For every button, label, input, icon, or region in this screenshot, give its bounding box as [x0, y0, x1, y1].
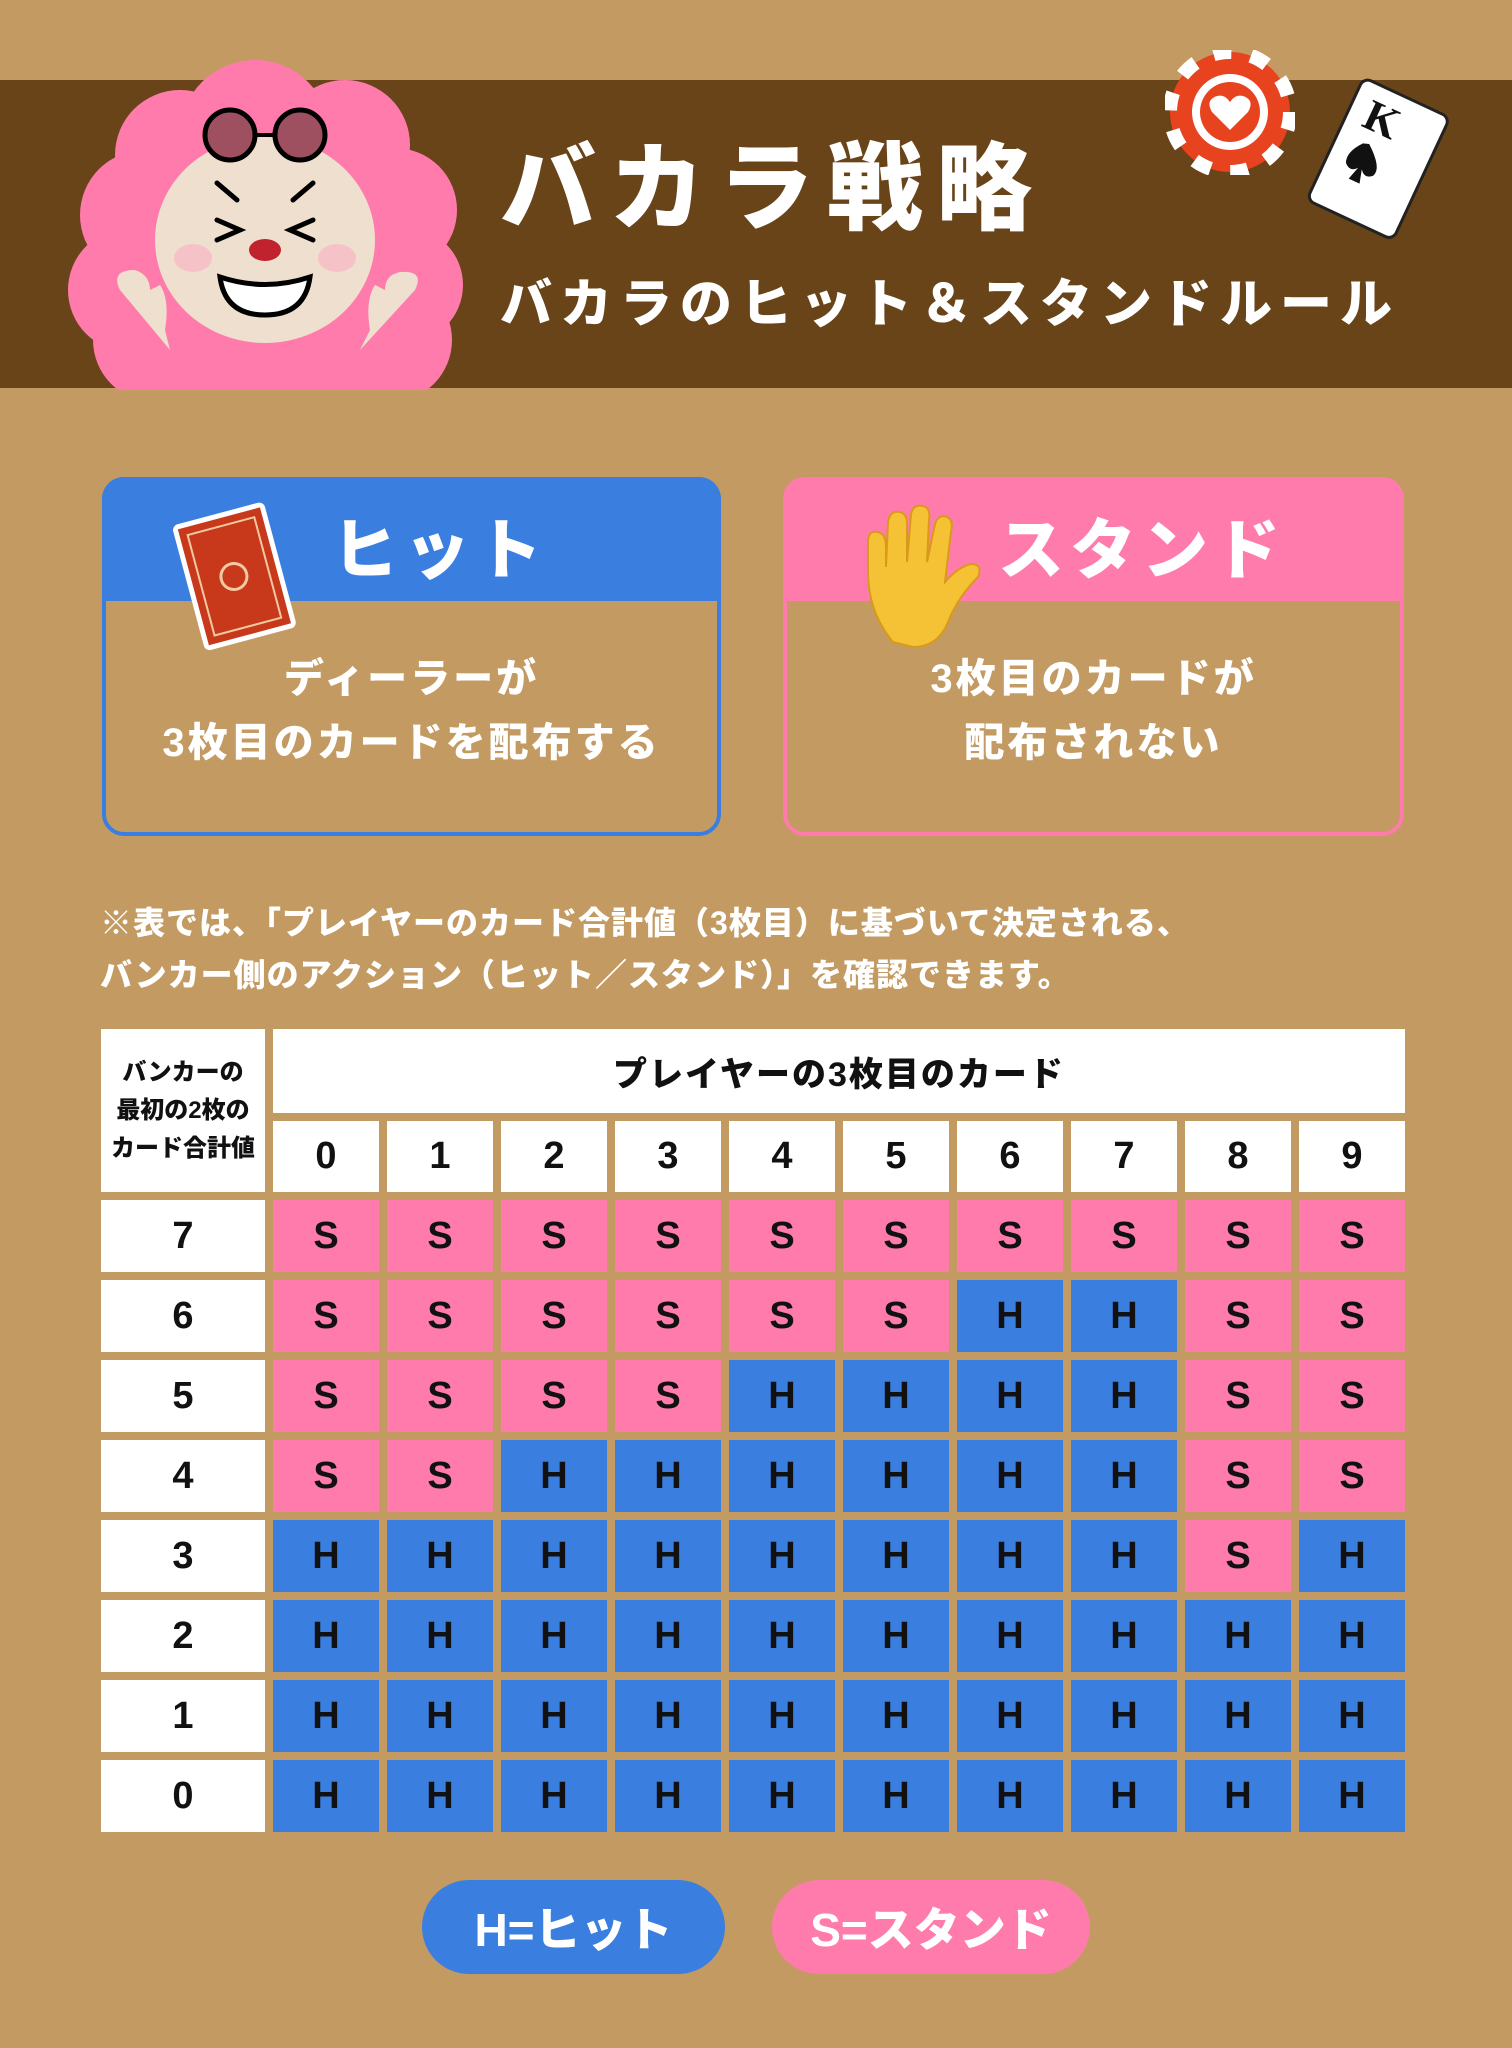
table: banker action: H — [882, 1774, 910, 1816]
table: banker action: S — [655, 1374, 681, 1416]
legend: stand — [772, 1880, 1090, 1974]
table: banker action: H — [768, 1614, 796, 1656]
corner header: 最初の2枚の — [116, 1096, 250, 1124]
table: banker action: S — [427, 1294, 453, 1336]
mascot character — [68, 60, 463, 390]
icon: raised hand — [867, 504, 980, 648]
note text: ※表では、「プレイヤーのカード合計値（3枚目）に基づいて決定される、 — [100, 905, 1190, 941]
table: banker action: H — [312, 1774, 340, 1816]
icon: card back — [173, 502, 296, 650]
table: banker action: H — [654, 1534, 682, 1576]
corner header — [101, 1029, 265, 1192]
table: banker action: H — [1224, 1774, 1252, 1816]
table: banker action: H — [654, 1454, 682, 1496]
table: banker action: H — [1110, 1374, 1138, 1416]
table: banker action: H — [882, 1374, 910, 1416]
table: banker action: S — [1339, 1454, 1365, 1496]
stand header — [783, 477, 1404, 601]
table: banker action: H — [996, 1614, 1024, 1656]
table: banker action: 5 — [885, 1135, 907, 1177]
table: banker action: H — [312, 1534, 340, 1576]
table: banker action — [101, 1029, 1405, 1832]
note text — [100, 905, 1190, 993]
icon: king of spades card: K — [1356, 90, 1408, 149]
table: banker action: H — [1338, 1534, 1366, 1576]
table: banker action: H — [1110, 1614, 1138, 1656]
table: banker action: S — [883, 1214, 909, 1256]
table: banker action: H — [768, 1774, 796, 1816]
table: banker action: 6 — [999, 1135, 1021, 1177]
player header — [273, 1029, 1405, 1113]
table: banker action: S — [1225, 1214, 1251, 1256]
table: banker action: 9 — [1341, 1135, 1363, 1177]
subtitle: バカラのヒット＆スタンドルール — [500, 276, 1400, 334]
row 3 — [101, 1520, 265, 1592]
table: banker action: H — [882, 1454, 910, 1496]
legend: hit — [422, 1880, 725, 1974]
table: banker action: S — [541, 1294, 567, 1336]
table: banker action: S — [313, 1214, 339, 1256]
note text: バンカー側のアクション（ヒット／スタンド）」を確認できます。 — [100, 957, 1071, 993]
table: banker action: H — [1224, 1694, 1252, 1736]
table: banker action: H — [996, 1694, 1024, 1736]
table: banker action: H — [882, 1614, 910, 1656]
icon: casino chip — [1165, 50, 1295, 175]
panel: stand — [783, 477, 1404, 836]
table: banker action: S — [997, 1214, 1023, 1256]
table: banker action: H — [768, 1374, 796, 1416]
table: banker action: H — [540, 1774, 568, 1816]
stand description: 3枚目のカードが — [930, 657, 1257, 701]
row 1: 1 — [172, 1694, 194, 1736]
table: banker action: H — [1338, 1694, 1366, 1736]
table: banker action: H — [312, 1694, 340, 1736]
table: banker action: S — [655, 1294, 681, 1336]
table: banker action: S — [541, 1374, 567, 1416]
row 2: 2 — [172, 1614, 194, 1656]
table: banker action: H — [768, 1454, 796, 1496]
table: banker action: H — [768, 1694, 796, 1736]
table: banker action: H — [540, 1534, 568, 1576]
table: banker action: S — [655, 1214, 681, 1256]
table: banker action: S — [883, 1294, 909, 1336]
table: banker action: H — [426, 1614, 454, 1656]
table: banker action: S — [427, 1374, 453, 1416]
table: banker action: 3 — [657, 1135, 679, 1177]
table: banker action: 0 — [315, 1135, 337, 1177]
table: banker action: S — [1225, 1534, 1251, 1576]
table: banker action: H — [996, 1454, 1024, 1496]
table: banker action: H — [996, 1294, 1024, 1336]
table: banker action: H — [426, 1534, 454, 1576]
table: banker action: H — [312, 1614, 340, 1656]
row 5 — [101, 1360, 265, 1432]
table: banker action: H — [1110, 1694, 1138, 1736]
legend: stand: S=スタンド — [810, 1904, 1052, 1956]
row 1 — [101, 1680, 265, 1752]
table: banker action: H — [1110, 1774, 1138, 1816]
table: banker action: H — [426, 1774, 454, 1816]
header band — [0, 80, 1512, 388]
table: banker action: H — [540, 1614, 568, 1656]
table: banker action: S — [1225, 1294, 1251, 1336]
row 7: 7 — [172, 1214, 194, 1256]
player header: プレイヤーの3枚目のカード — [613, 1056, 1065, 1094]
table: banker action: S — [1339, 1294, 1365, 1336]
hit description — [162, 656, 661, 765]
hit description: ディーラーが — [284, 657, 539, 701]
row 5: 5 — [172, 1374, 194, 1416]
row 4: 4 — [172, 1454, 194, 1496]
title: バカラ戦略 — [500, 136, 1045, 243]
table: banker action: 2 — [543, 1135, 565, 1177]
row 7 — [101, 1200, 265, 1272]
row 6 — [101, 1280, 265, 1352]
table: banker action: S — [313, 1454, 339, 1496]
table: banker action: S — [313, 1374, 339, 1416]
table: banker action: S — [541, 1214, 567, 1256]
table: banker action: H — [540, 1694, 568, 1736]
table: banker action: H — [1338, 1614, 1366, 1656]
hit description: 3枚目のカードを配布する — [162, 721, 661, 765]
stand description — [930, 656, 1257, 765]
table: banker action: S — [313, 1294, 339, 1336]
table: banker action: S — [769, 1294, 795, 1336]
table: banker action: S — [1339, 1214, 1365, 1256]
table: banker action: H — [1110, 1454, 1138, 1496]
stand label: スタンド — [998, 513, 1286, 587]
table: banker action: S — [427, 1214, 453, 1256]
table: banker action: H — [1110, 1294, 1138, 1336]
table: banker action: H — [1110, 1534, 1138, 1576]
table: banker action: H — [426, 1694, 454, 1736]
row 0 — [101, 1760, 265, 1832]
hit label: ヒット — [332, 513, 548, 587]
row 2 — [101, 1600, 265, 1672]
table: banker action: H — [882, 1694, 910, 1736]
table: banker action: H — [996, 1774, 1024, 1816]
legend: hit: H=ヒット — [474, 1904, 673, 1956]
table: banker action: S — [1225, 1454, 1251, 1496]
hit header — [102, 477, 721, 601]
table: banker action: 7 — [1113, 1135, 1135, 1177]
table: banker action: H — [768, 1534, 796, 1576]
table: banker action: H — [996, 1534, 1024, 1576]
row 4 — [101, 1440, 265, 1512]
corner header: カード合計値 — [111, 1134, 255, 1162]
row 0: 0 — [172, 1774, 194, 1816]
row 6: 6 — [172, 1294, 194, 1336]
table: banker action: 1 — [429, 1135, 451, 1177]
table: banker action: H — [882, 1534, 910, 1576]
table: banker action: H — [996, 1374, 1024, 1416]
table: banker action: S — [1111, 1214, 1137, 1256]
table: banker action: S — [427, 1454, 453, 1496]
row 3: 3 — [172, 1534, 194, 1576]
table: banker action: S — [1339, 1374, 1365, 1416]
table: banker action: 4 — [771, 1135, 793, 1177]
table: banker action: H — [1224, 1614, 1252, 1656]
corner header: バンカーの — [122, 1058, 244, 1086]
stand description: 配布されない — [964, 721, 1222, 765]
table: banker action: H — [1338, 1774, 1366, 1816]
table: banker action: S — [1225, 1374, 1251, 1416]
table: banker action: H — [654, 1694, 682, 1736]
panel: hit — [102, 477, 721, 836]
table: banker action: H — [540, 1454, 568, 1496]
table: banker action: 8 — [1227, 1135, 1249, 1177]
table: banker action: H — [654, 1614, 682, 1656]
icon: king of spades card — [1308, 78, 1449, 239]
table: banker action: H — [654, 1774, 682, 1816]
table: banker action: S — [769, 1214, 795, 1256]
